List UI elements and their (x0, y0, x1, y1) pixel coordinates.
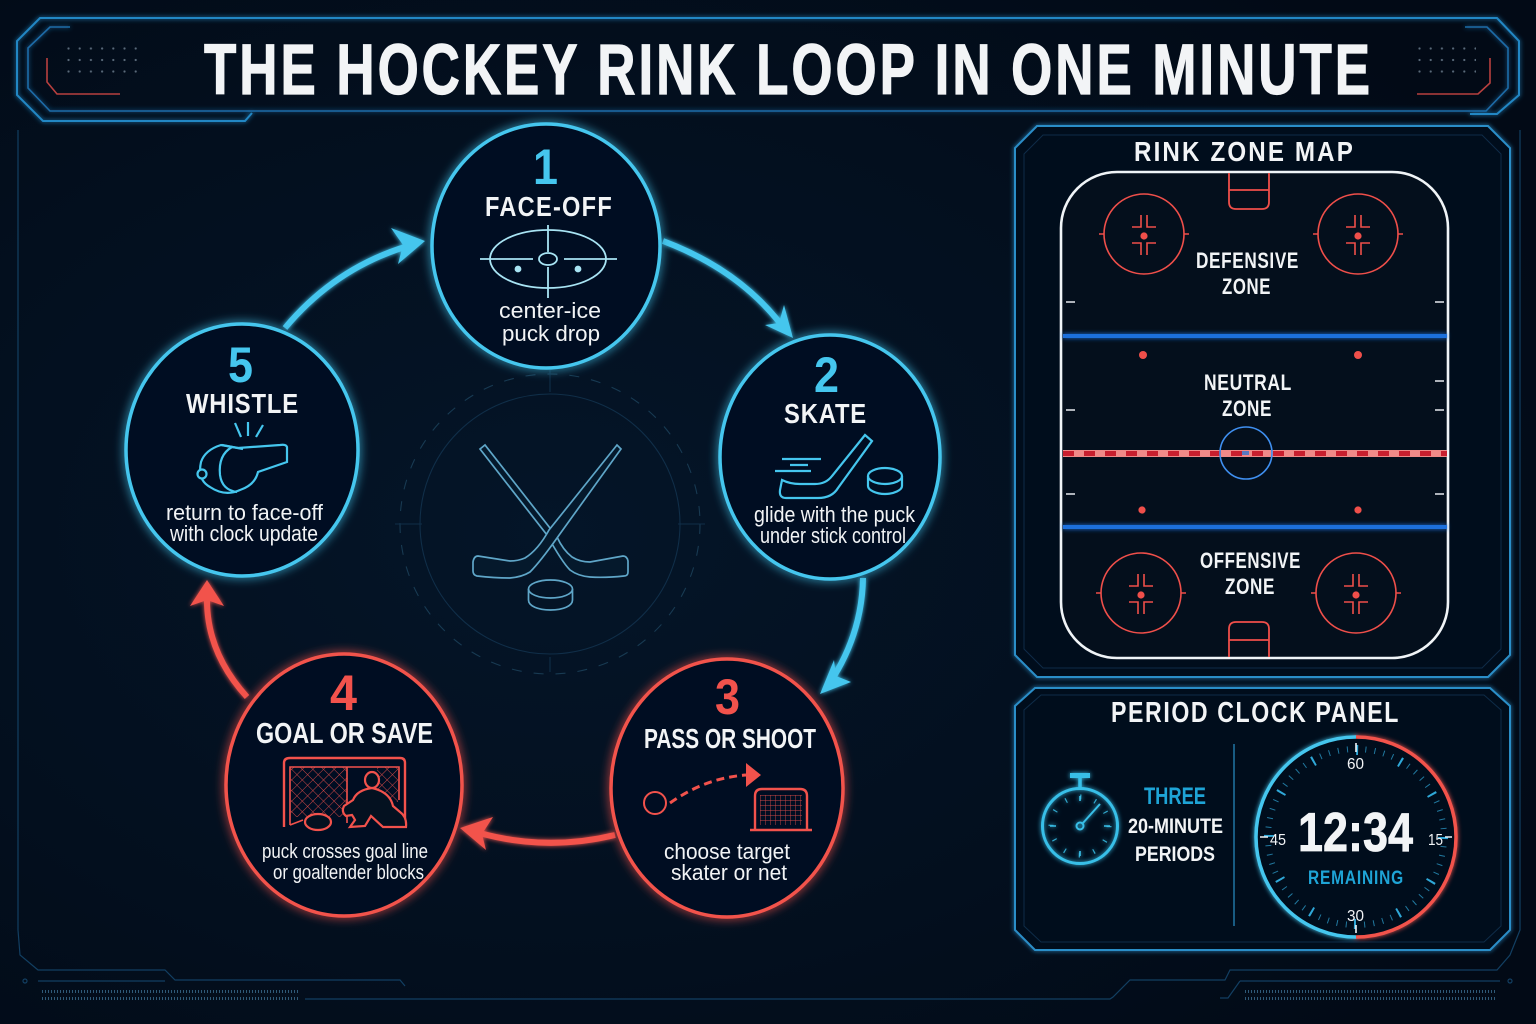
dial major marks (1260, 743, 1452, 933)
arrow: pass or shoot to goal or save (460, 817, 615, 850)
step 5 caption: return to face-off (166, 500, 324, 525)
step 4 caption: puck crosses goal line (262, 840, 428, 863)
dial arcs (1256, 737, 1456, 937)
step 2 caption: glide with the puck (754, 502, 916, 527)
icon: goalie in net (284, 758, 406, 830)
title banner (17, 18, 1519, 121)
dial numbers: 60 (1347, 756, 1364, 773)
periods text: 20-MINUTE (1128, 814, 1223, 838)
step 1 heading: FACE-OFF (485, 191, 613, 222)
arrow: skate to pass or shoot (820, 578, 863, 694)
offensive zone label: ZONE (1225, 574, 1275, 599)
blue lines (1063, 334, 1447, 529)
center emblem: crossed sticks and puck (395, 370, 705, 674)
arrow: whistle to face-off (285, 228, 425, 328)
banner frame (17, 18, 1519, 121)
step 3: pass or shoot (611, 659, 843, 917)
time remaining digits: 12:34 (1298, 801, 1413, 863)
icon: stopwatch (1042, 776, 1118, 864)
board ticks (1066, 302, 1444, 494)
step 1 caption: puck drop (502, 321, 600, 346)
defensive zone label (1196, 248, 1299, 299)
step 4 heading: GOAL OR SAVE (256, 718, 433, 750)
dial numbers: 15 (1428, 832, 1443, 849)
icon: whistle (198, 422, 287, 493)
center ice circle (1220, 427, 1272, 479)
clock panel frame (1015, 688, 1510, 950)
banner dot grids (63, 43, 1476, 78)
step 2 number: 2 (814, 347, 839, 403)
periods text: THREE (1144, 783, 1206, 810)
step 3 caption: choose target (664, 839, 790, 864)
step 5 heading: WHISTLE (186, 388, 299, 419)
banner red corner accents (47, 58, 1490, 94)
rink diagram (1061, 172, 1448, 658)
clock panel heading: PERIOD CLOCK PANEL (1111, 697, 1400, 729)
step 3 number: 3 (715, 669, 740, 725)
step 3 heading: PASS OR SHOOT (644, 723, 816, 754)
icon: pass path to net (644, 763, 812, 830)
dial numbers: 30 (1347, 908, 1364, 925)
step 4 number: 4 (330, 665, 357, 721)
defensive zone label: DEFENSIVE (1196, 248, 1299, 273)
step 1 caption: center-ice (499, 298, 601, 323)
arrow: goal or save to whistle (190, 580, 247, 697)
dial ticks (1268, 749, 1444, 925)
offensive zone label (1200, 548, 1301, 599)
neutral zone label (1204, 370, 1292, 421)
step 5 number: 5 (228, 337, 253, 393)
step 2 caption: under stick control (760, 523, 906, 548)
neutral zone dots (1138, 351, 1362, 514)
panel: period clock (1015, 688, 1510, 950)
panel: rink zone map (1015, 126, 1510, 677)
offensive zone label: OFFENSIVE (1200, 548, 1301, 573)
neutral zone label: NEUTRAL (1204, 370, 1292, 395)
step 2 caption (754, 502, 916, 548)
divider (1233, 744, 1235, 926)
step 1 caption (499, 298, 601, 346)
icon: stick and puck (775, 435, 902, 498)
step 3 caption (664, 839, 790, 885)
step 5 caption: with clock update (169, 521, 318, 546)
step 2 heading: SKATE (784, 398, 867, 429)
arrow: face-off to skate (663, 241, 793, 338)
step 4 caption: or goaltender blocks (273, 861, 424, 884)
dial numbers: 45 (1270, 832, 1286, 849)
step 2: skate (720, 335, 940, 579)
step 5: whistle (126, 324, 358, 576)
periods text: PERIODS (1135, 842, 1215, 866)
defensive zone label: ZONE (1222, 274, 1271, 299)
step 5 caption (166, 500, 324, 546)
face-off circles (1096, 194, 1403, 633)
step 4 caption (262, 840, 428, 884)
step 1 number: 1 (533, 139, 558, 195)
remaining label: REMAINING (1308, 868, 1404, 889)
panel heading: RINK ZONE MAP (1134, 136, 1355, 167)
center red line (1063, 450, 1447, 457)
goal creases (1229, 173, 1269, 657)
icon: center-ice face-off circle (480, 225, 617, 298)
panel frame (1015, 126, 1510, 677)
dial numbers (1270, 756, 1443, 925)
step 4: goal or save (226, 654, 462, 916)
step 3 caption: skater or net (671, 860, 787, 885)
neutral zone label: ZONE (1222, 396, 1272, 421)
periods text (1128, 783, 1223, 866)
step 1: face-off (432, 124, 660, 368)
dial: game clock (1256, 737, 1456, 937)
